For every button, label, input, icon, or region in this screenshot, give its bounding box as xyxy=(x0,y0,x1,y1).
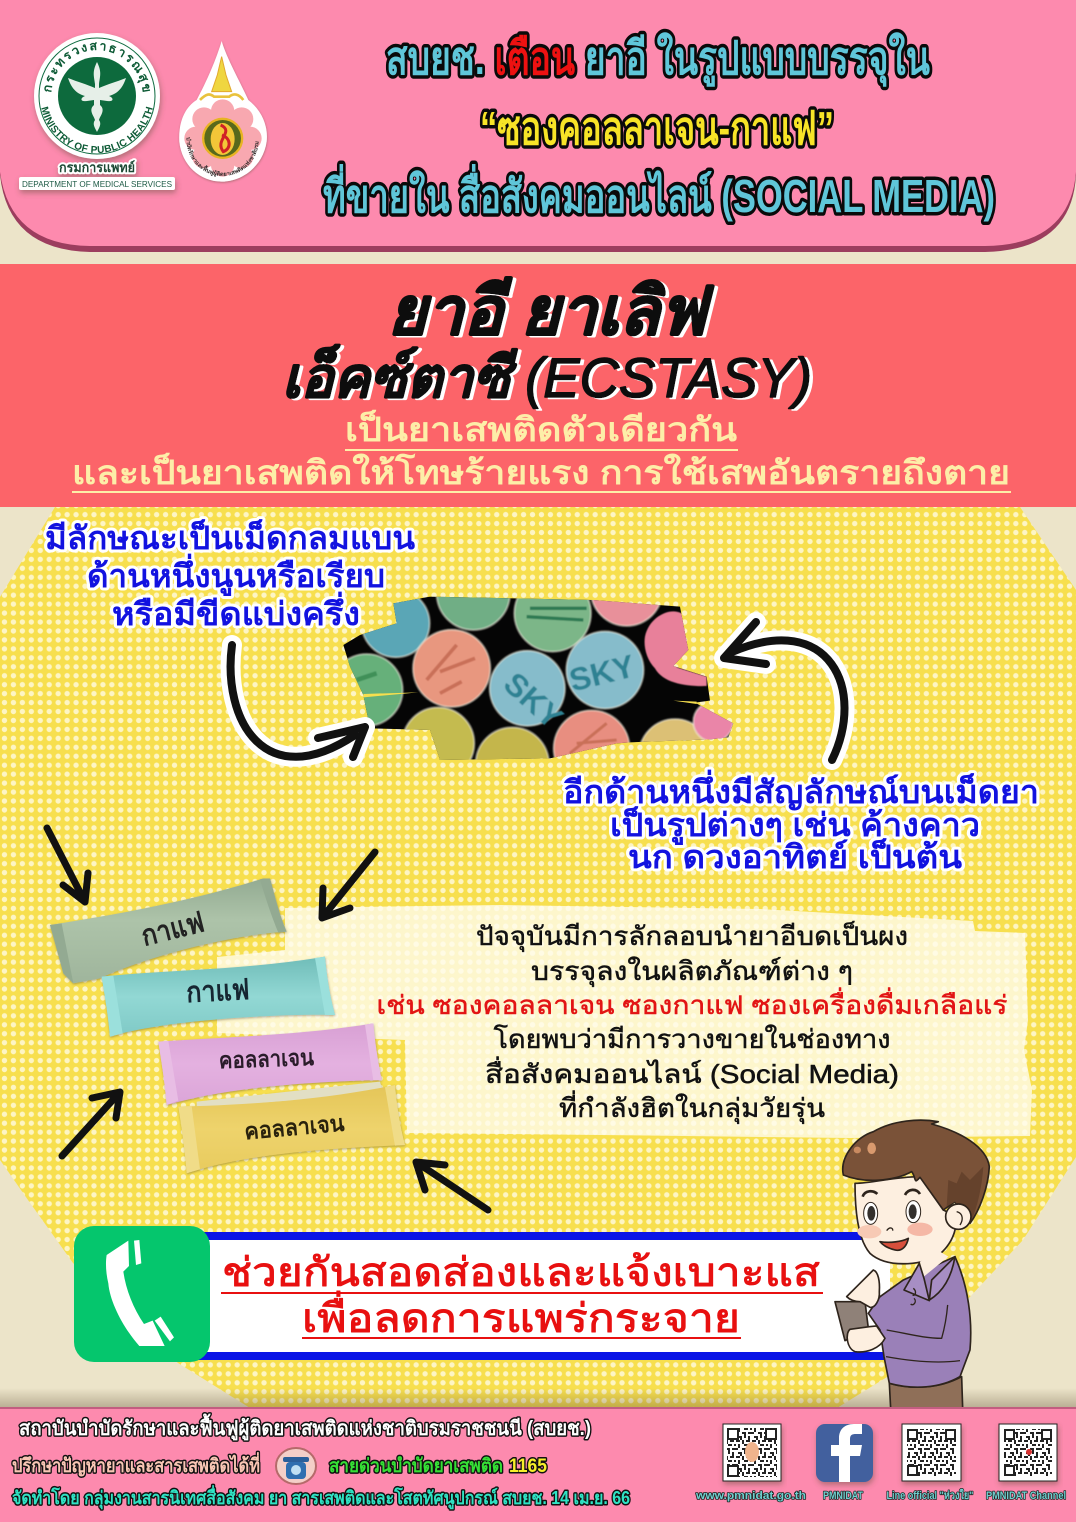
sachet: pale gap piece xyxy=(197,1082,383,1108)
text: pill shape description xyxy=(45,518,415,632)
arrow: top-right sachet xyxy=(322,852,375,918)
QR captions: www.pmnidat.go.th xyxy=(695,1490,806,1502)
QR captions: Line official "ห่วงใย" xyxy=(886,1488,974,1502)
sachet: green coffee: กาแฟ xyxy=(138,906,207,953)
sachet: teal coffee xyxy=(102,957,335,1037)
sachet: pink collagen xyxy=(158,1023,382,1105)
banner text: ช่วยกันสอดส่องและแจ้งเบาะแส xyxy=(222,1251,820,1295)
panel: explanation text: โดยพบว่ามีการวางขายในช่องทาง xyxy=(494,1024,890,1054)
heading: drug names: เอ็คซ์ตาซี (ECSTASY) xyxy=(282,344,812,409)
banner text xyxy=(221,1251,823,1341)
text: pill symbols description: นก ดวงอาทิตย์ เป็นต้น xyxy=(628,837,962,875)
arrow: bottom-left sachet xyxy=(62,1092,120,1156)
banner text: เพื่อลดการแพร่กระจาย xyxy=(302,1291,740,1341)
photo: ecstasy pills: SKY xyxy=(566,648,638,698)
icon: phone xyxy=(74,1226,210,1362)
QR code: website xyxy=(723,1424,781,1481)
sub heading with underline: และเป็นยาเสพติดให้โทษร้ายแรง การใช้เสพอันตรายถึงตาย xyxy=(72,452,1010,491)
footer: hotline number: 1165 xyxy=(509,1456,547,1477)
text: pill shape description: หรือมีขีดแบ่งครึ่ง xyxy=(112,591,360,632)
icon: facebook xyxy=(816,1424,873,1482)
logo: ministry of public health: MINISTRY OF PUBLIC HEALTH xyxy=(41,106,153,153)
shadow above footer xyxy=(0,1388,1076,1408)
panel: explanation text: สื่อสังคมออนไลน์ (Social Media) xyxy=(485,1056,899,1089)
footer: credit line: จัดทำโดย กลุ่มงานสารนิเทศสื่อสังคม ยา สารเสพติดและโสตทัศนูปกรณ์ สบยช. 14 เม.ย. 66 xyxy=(12,1485,630,1510)
logo: institute emblem xyxy=(178,41,268,184)
arrow: pill back xyxy=(724,622,845,760)
panel: header xyxy=(0,0,1076,252)
sachet: yellow collagen: คอลลาเจน xyxy=(243,1110,346,1144)
text: pill shape description: มีลักษณะเป็นเม็ดกลมแบน xyxy=(45,518,415,556)
footer: institute name: สถาบันบำบัดรักษาและฟื้นฟูผู้ติดยาเสพติดแห่งชาติบรมราชชนนี (สบยช.) xyxy=(19,1413,591,1442)
title line 1: สบยช. เตือน ยาอี ในรูปแบบบรรจุใน xyxy=(386,31,930,87)
photo: ecstasy pills: SKY xyxy=(497,665,570,736)
banner: report call to action xyxy=(74,1226,890,1362)
QR captions xyxy=(695,1488,1066,1502)
footer: consult text: ปรึกษาปัญหายาและสารเสพติดได้ที่ xyxy=(12,1452,260,1477)
logo: ministry of public health: กระทรวงสาธารณสุข xyxy=(44,42,150,92)
sachet: teal coffee: กาแฟ xyxy=(185,974,250,1009)
sachets xyxy=(50,878,405,1173)
sachet: green coffee xyxy=(50,878,287,983)
title line 2: “ซองคอลลาเจน-กาแฟ” xyxy=(480,102,834,154)
arrow: top-left sachet xyxy=(47,828,88,902)
text: pill shape description: ด้านหนึ่งนูนหรือเรียบ xyxy=(87,553,385,597)
panel: explanation text xyxy=(217,905,1032,1138)
photo: ecstasy pills xyxy=(343,596,734,760)
footer: hotline: สายด่วนบำบัดยาเสพติด xyxy=(329,1456,503,1477)
logo: institute emblem: สถาบันบำบัดรักษาและฟื้นฟูผู้ติดยาเสพติดแห่งชาติบรมราชชนนี xyxy=(186,137,259,177)
panel: footer xyxy=(0,1407,1076,1522)
heading: drug names: ยาอี ยาเลิฟ xyxy=(388,274,714,348)
text: pill symbols description: เป็นรูปต่างๆ เช่น ค้างคาว xyxy=(610,805,980,846)
panel: explanation text: บรรจุลงในผลิตภัณฑ์ต่าง ๆ xyxy=(531,956,853,987)
text: pill symbols description: อีกด้านหนึ่งมีสัญลักษณ์บนเม็ดยา xyxy=(563,769,1039,811)
dotted yellow background shape xyxy=(0,507,1076,1408)
heading: drug names xyxy=(282,274,812,409)
sub heading with underline xyxy=(72,409,1011,493)
panel: explanation text: เช่น ซองคอลลาเจน ซองกาแฟ ซองเครื่องดื่มเกลือแร่ xyxy=(376,987,1008,1020)
text: pill symbols description xyxy=(563,769,1039,875)
sachet: pink collagen: คอลลาเจน xyxy=(218,1044,315,1073)
sub heading with underline: เป็นยาเสพติดตัวเดียวกัน xyxy=(345,409,738,448)
QR captions: PMNIDAT xyxy=(823,1490,863,1502)
arrow: pill front xyxy=(231,645,365,757)
QR code: line official xyxy=(902,1424,961,1481)
sachet: yellow collagen xyxy=(178,1085,405,1173)
panel: red warning band xyxy=(0,264,1076,507)
QR code: channel xyxy=(999,1424,1057,1481)
panel: explanation text: ที่กำลังฮิตในกลุ่มวัยรุ่น xyxy=(559,1090,825,1124)
arrow: bottom-right sachet xyxy=(416,1162,488,1210)
icon: hotline telephone xyxy=(276,1448,316,1484)
illustration: boy with phone xyxy=(835,1120,989,1408)
panel: explanation text: ปัจจุบันมีการลักลอบนำยาอีบดเป็นผง xyxy=(476,920,908,952)
logo: ministry of public health: DEPARTMENT OF MEDICAL SERVICES xyxy=(22,179,172,189)
logo: ministry of public health: กรมการแพทย์ xyxy=(59,160,135,175)
logo: ministry of public health xyxy=(16,32,180,196)
